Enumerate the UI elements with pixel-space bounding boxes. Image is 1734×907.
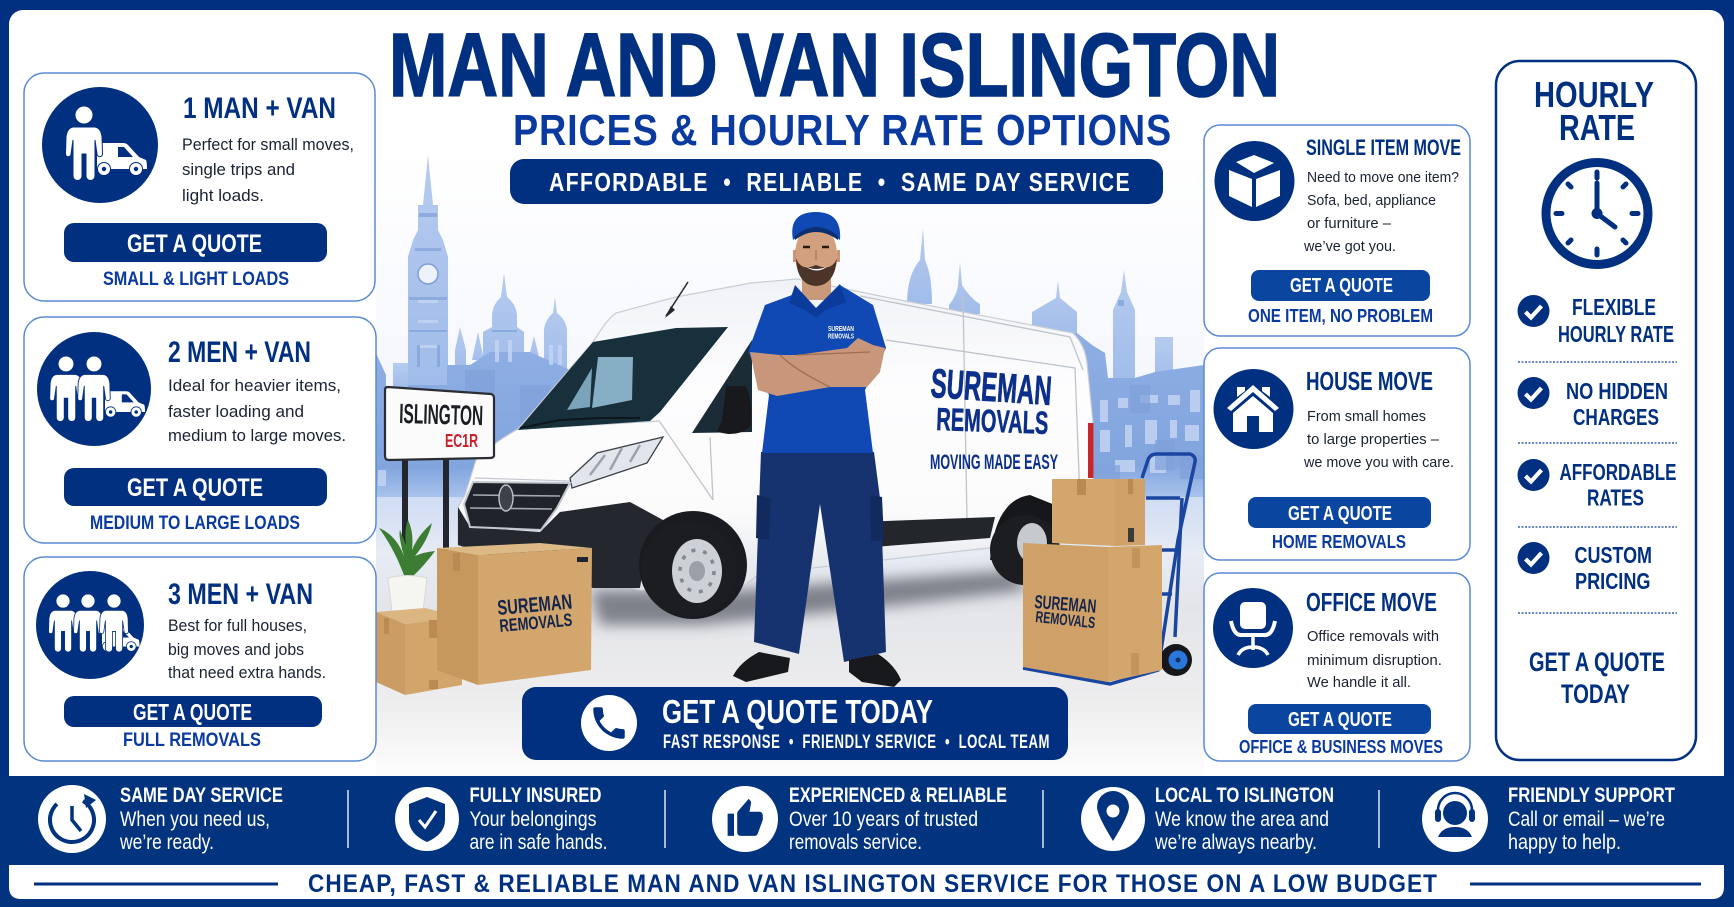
icon: clock with arrow <box>38 785 106 853</box>
city window detail <box>378 300 1200 486</box>
big box: REMOVALS <box>499 610 573 636</box>
shirt logo: SUREMAN <box>828 326 854 333</box>
headlight <box>570 437 663 488</box>
feature: same day service: SAME DAY SERVICE <box>120 784 283 807</box>
panel: 1 man + van: SMALL & LIGHT LOADS <box>103 269 289 290</box>
description: From small homes <box>1307 409 1426 425</box>
van wording: MOVING MADE EASY <box>930 451 1058 474</box>
shirt logo <box>828 325 854 340</box>
description: we’ve got you. <box>1303 239 1396 255</box>
benefit: flexible hourly rate <box>1518 294 1674 347</box>
panel: office move: OFFICE MOVE <box>1306 587 1437 617</box>
hand trolley <box>1023 454 1195 684</box>
feature: friendly support: Call or email – we’re <box>1508 808 1665 831</box>
van <box>458 279 1094 619</box>
main title: MAN AND VAN ISLINGTON <box>389 16 1280 116</box>
description: Sofa, bed, appliance <box>1307 193 1436 209</box>
feature: experienced and reliable: Over 10 years of trusted <box>789 808 978 831</box>
quote button: GET A QUOTE <box>1290 275 1393 297</box>
description: faster loading and <box>168 402 304 421</box>
call to action <box>522 687 1068 760</box>
quote button <box>64 223 327 262</box>
feature: friendly support <box>1422 784 1675 854</box>
feature: fully insured: are in safe hands. <box>470 831 608 854</box>
heading: RATE <box>1559 107 1635 148</box>
panel: single item move: ONE ITEM, NO PROBLEM <box>1248 306 1433 326</box>
feature: local to islington: LOCAL TO ISLINGTON <box>1155 784 1334 807</box>
quote button <box>1248 497 1431 528</box>
panel: house move <box>1204 348 1470 560</box>
rear light <box>1088 423 1094 478</box>
sign posts <box>402 458 449 550</box>
right towers <box>907 228 1173 387</box>
features bar <box>0 776 1734 907</box>
quote button <box>64 468 327 506</box>
quote prompt <box>1529 647 1665 709</box>
lower box: REMOVALS <box>1035 609 1096 632</box>
description: medium to large moves. <box>168 426 346 445</box>
arm creases <box>780 352 870 387</box>
collar <box>789 284 846 318</box>
windscreen panes <box>592 357 633 408</box>
benefit: no hidden charges: NO HIDDEN <box>1566 378 1668 404</box>
trousers <box>754 452 886 662</box>
smile <box>805 266 828 270</box>
panel: 3 men + van: FULL REMOVALS <box>123 730 261 751</box>
van wording: REMOVALS <box>936 401 1049 441</box>
eyes <box>803 246 829 248</box>
icon: office chair <box>1213 588 1293 668</box>
feature: fully insured: Your belongings <box>470 808 596 831</box>
left towers <box>393 155 567 390</box>
shirt logo: REMOVALS <box>828 334 854 340</box>
phone icon <box>581 695 637 751</box>
call to action: FAST RESPONSE • FRIENDLY SERVICE • LOCAL TEAM <box>663 732 1050 753</box>
benefit: custom pricing: CUSTOM <box>1574 542 1652 568</box>
van wording <box>929 360 1058 474</box>
wing mirror <box>717 386 751 434</box>
icon: one man and van <box>42 87 158 203</box>
panel: 2 men + van: MEDIUM TO LARGE LOADS <box>90 513 300 534</box>
feature: friendly support: happy to help. <box>1508 831 1621 854</box>
panel: 1 man + van: 1 MAN + VAN <box>183 92 336 125</box>
panel: office move <box>1204 573 1470 761</box>
lower box: SUREMAN <box>1034 592 1097 618</box>
skyline <box>376 155 1204 497</box>
tagline pill <box>510 159 1163 204</box>
shoes <box>733 652 901 687</box>
benefit: custom pricing: PRICING <box>1575 568 1650 594</box>
head <box>795 224 837 286</box>
bottom slogan strip: CHEAP, FAST & RELIABLE MAN AND VAN ISLINGTON SERVICE FOR THOSE ON A LOW BUDGET <box>308 870 1438 898</box>
feature: friendly support: FRIENDLY SUPPORT <box>1508 784 1675 807</box>
feature: same day service <box>38 784 283 854</box>
sky background <box>376 150 1204 497</box>
feature: local to islington: we’re always nearby. <box>1154 831 1317 854</box>
road sign: ISLINGTON <box>399 398 484 431</box>
benefit: affordable rates: AFFORDABLE <box>1560 459 1676 485</box>
left small box <box>376 608 462 695</box>
panel: 2 men + van <box>24 317 376 543</box>
feature: same day service: When you need us, <box>120 808 270 831</box>
removal man <box>733 212 901 687</box>
description: light loads. <box>182 186 264 205</box>
sign board <box>385 387 494 460</box>
grille bars <box>470 495 560 509</box>
description: Office removals with <box>1307 629 1439 645</box>
big box: SUREMAN <box>496 591 573 620</box>
quote prompt: GET A QUOTE <box>1529 647 1665 677</box>
nose <box>815 250 817 260</box>
benefit: flexible hourly rate: HOURLY RATE <box>1558 321 1674 347</box>
panel: single item move <box>1204 125 1470 336</box>
panel: 3 men + van <box>24 557 376 761</box>
headlight detail <box>590 445 640 475</box>
description <box>182 135 354 205</box>
feature: fully insured: FULLY INSURED <box>470 784 602 807</box>
cap <box>792 212 840 240</box>
panel: hourly rate <box>1496 61 1696 760</box>
grille <box>464 482 570 530</box>
feature: same day service: we’re ready. <box>119 831 214 854</box>
feature: fully insured <box>395 784 608 854</box>
feature: local to islington: We know the area and <box>1155 808 1329 831</box>
van body <box>458 279 1093 590</box>
plant <box>379 520 435 616</box>
benefit: affordable rates: RATES <box>1587 484 1644 510</box>
ears <box>793 250 840 262</box>
wipers <box>520 418 640 428</box>
icon: shield <box>395 787 459 851</box>
description: to large properties – <box>1307 432 1440 448</box>
polo shirt <box>748 285 886 453</box>
trolley wheel <box>1160 644 1192 676</box>
neck <box>802 270 831 300</box>
hood line <box>475 421 660 481</box>
tagline pill: AFFORDABLE • RELIABLE • SAME DAY SERVICE <box>549 167 1131 197</box>
panel: 3 men + van: 3 MEN + VAN <box>168 578 313 611</box>
icon: clock <box>1546 162 1648 264</box>
antenna <box>666 282 688 316</box>
quote button <box>1251 270 1430 301</box>
clock face <box>418 264 438 284</box>
subtitle: PRICES & HOURLY RATE OPTIONS <box>513 106 1172 155</box>
description <box>168 616 326 682</box>
right lower city mass <box>1040 333 1204 497</box>
heading: HOURLY <box>1534 74 1654 115</box>
quote button: GET A QUOTE <box>127 230 262 258</box>
panel: 2 men + van: 2 MEN + VAN <box>168 336 311 369</box>
right box stack <box>1023 479 1162 682</box>
floor <box>376 497 1204 776</box>
big box <box>437 543 592 685</box>
rear wheel <box>990 495 1060 585</box>
feature: experienced and reliable <box>712 784 1007 854</box>
description <box>1303 170 1459 255</box>
left lower city mass <box>376 352 600 497</box>
upper box <box>1052 479 1145 546</box>
cargo pockets <box>756 495 884 542</box>
icon: map pin <box>1081 787 1145 851</box>
side panel lines <box>660 296 1083 520</box>
description: We handle it all. <box>1307 675 1411 691</box>
description <box>168 376 346 445</box>
hero scene <box>376 150 1204 776</box>
quote prompt: TODAY <box>1561 679 1630 709</box>
icon: thumbs up <box>712 786 778 852</box>
panel: house move: HOUSE MOVE <box>1306 366 1433 396</box>
quote button: GET A QUOTE <box>1288 503 1392 525</box>
description: single trips and <box>182 160 295 179</box>
front wheel <box>641 521 737 617</box>
benefit: affordable rates <box>1518 459 1676 510</box>
description: minimum disruption. <box>1307 653 1442 669</box>
windshield <box>518 327 728 430</box>
description: big moves and jobs <box>168 640 304 659</box>
icon: two men and van <box>37 332 151 446</box>
side window <box>692 340 752 433</box>
description: Ideal for heavier items, <box>168 376 341 395</box>
description: that need extra hands. <box>168 663 326 682</box>
panel: house move: HOME REMOVALS <box>1272 532 1406 552</box>
feature: experienced and reliable: removals service. <box>789 831 922 854</box>
benefit: custom pricing <box>1518 542 1652 594</box>
van wording: SUREMAN <box>929 360 1053 414</box>
quote button <box>1248 704 1431 734</box>
bottom slogan strip <box>9 865 1724 899</box>
icon: box <box>1214 141 1294 221</box>
lower box <box>1023 543 1162 682</box>
call to action: GET A QUOTE TODAY <box>662 693 933 730</box>
description <box>1303 409 1454 471</box>
road sign <box>385 387 494 550</box>
icon: three men and van <box>36 571 144 679</box>
beard <box>796 258 837 286</box>
panel: 1 man + van <box>24 73 375 301</box>
wheel arch <box>639 511 747 619</box>
description: we move you with care. <box>1303 455 1454 471</box>
panel: single item move: SINGLE ITEM MOVE <box>1306 135 1461 160</box>
lower bumper <box>458 502 663 588</box>
panel: office move: OFFICE & BUSINESS MOVES <box>1239 737 1443 757</box>
benefit: flexible hourly rate: FLEXIBLE <box>1572 294 1656 320</box>
quote button <box>64 696 322 727</box>
description: Perfect for small moves, <box>182 135 354 154</box>
folded arms <box>750 338 885 396</box>
floor shadow <box>590 570 1030 625</box>
rocker strip <box>860 517 995 548</box>
icon: headset agent <box>1422 786 1488 852</box>
quote button: GET A QUOTE <box>133 699 252 725</box>
feature: local to islington <box>1081 784 1334 854</box>
feature: experienced and reliable: EXPERIENCED & RELIABLE <box>789 784 1007 807</box>
road sign: EC1R <box>445 431 478 451</box>
description <box>1307 629 1442 691</box>
benefit: no hidden charges: CHARGES <box>1573 404 1659 430</box>
quote button: GET A QUOTE <box>1288 709 1392 731</box>
description: Best for full houses, <box>168 616 307 635</box>
icon: house <box>1214 369 1294 449</box>
heading <box>1534 74 1654 148</box>
benefit: no hidden charges <box>1518 377 1668 430</box>
quote button: GET A QUOTE <box>127 474 263 502</box>
description: Need to move one item? <box>1307 170 1459 186</box>
description: or furniture – <box>1307 216 1392 232</box>
van badge <box>499 485 513 511</box>
